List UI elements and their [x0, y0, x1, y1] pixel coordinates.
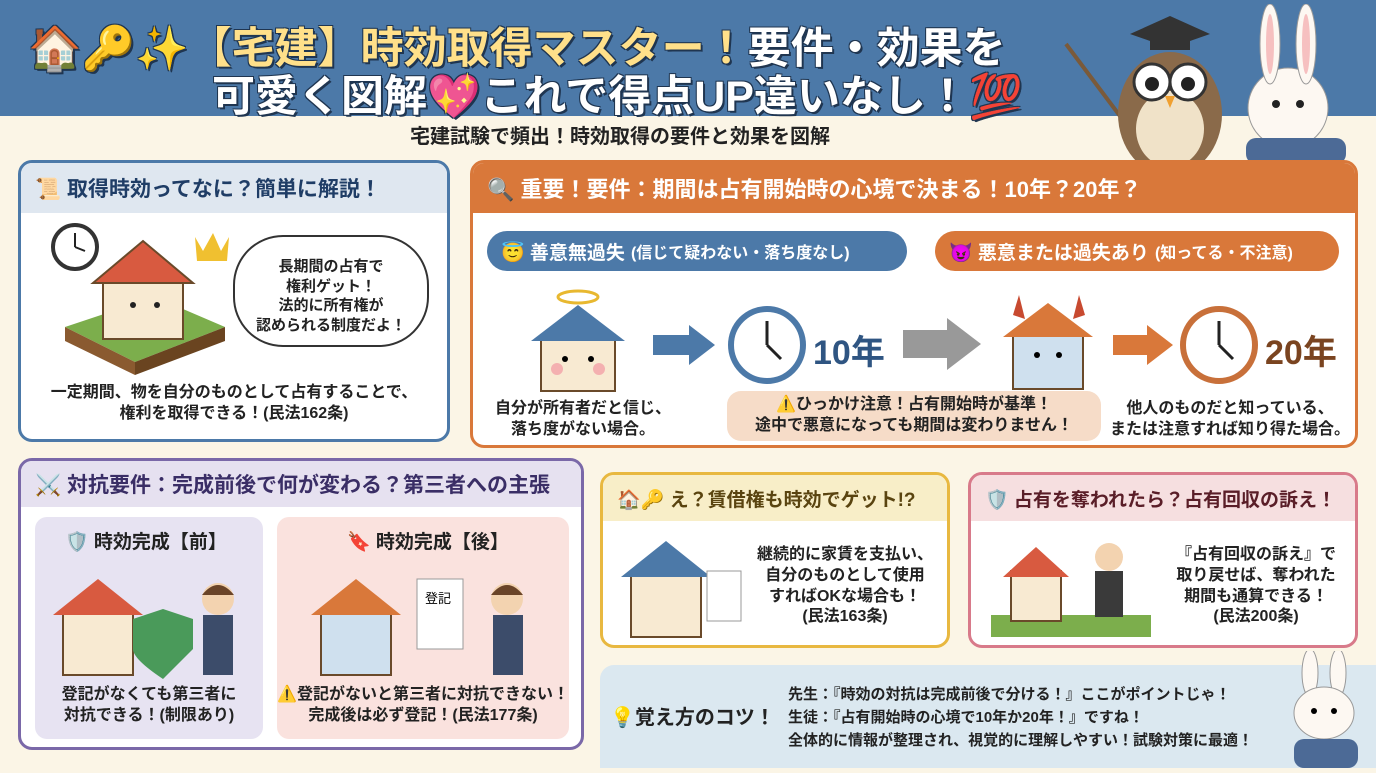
subtitle: 宅建試験で頻出！時効取得の要件と効果を図解 [410, 126, 830, 148]
subcard: after: ⚠️登記がないと第三者に対抗できない！ [277, 686, 569, 703]
clock 20 [1180, 306, 1258, 384]
subcard: before [35, 517, 263, 739]
illustration [991, 543, 1151, 637]
clock 10 [728, 306, 806, 384]
icon: devil house [1003, 295, 1093, 390]
panel: lease right: すればOKな場合も！ [769, 588, 921, 605]
text good faith: 自分が所有者だと信じ、 [495, 400, 671, 417]
bubble: bad faith: (知ってる・不注意) [1155, 245, 1293, 262]
illustration: house with clock and crown [51, 223, 229, 375]
icon: rabbit [1294, 651, 1358, 768]
arrow gray [903, 318, 981, 370]
text bad faith [1110, 399, 1350, 438]
speech bubble: 認められる制度だよ！ [256, 316, 406, 334]
description: 一定期間、物を自分のものとして占有することで、 [51, 384, 417, 401]
panel header: 🏠🔑 え？賃借権も時効でゲット!? [617, 490, 916, 510]
panel: recovery of possession: 期間も通算できる！ [1184, 588, 1328, 605]
panel: memory tip [600, 665, 1376, 768]
panel: recovery of possession [968, 472, 1358, 648]
panel: lease right [600, 472, 950, 648]
illustration: 登記 [425, 588, 451, 607]
20 years: 20年 [1265, 334, 1337, 372]
10 years: 10年 [813, 334, 885, 372]
panel header: 🔍 重要！要件：期間は占有開始時の心境で決まる！10年？20年？ [487, 177, 1141, 202]
panel header: ⚔️ 対抗要件：完成前後で何が変わる？第三者への主張 [35, 474, 550, 497]
text bad faith: または注意すれば知り得た場合。 [1110, 421, 1350, 438]
panel: recovery of possession: 取り戻せば、奪われた [1176, 567, 1336, 584]
subcard: before: 対抗できる！(制限あり) [64, 707, 234, 724]
tip text: 生徒：『占有開始時の心境で10年か20年！』ですね！ [788, 709, 1144, 726]
caution callout: 途中で悪意になっても期間は変わりません！ [755, 417, 1073, 434]
subcard: after: 🔖 時効完成【後】 [347, 532, 509, 553]
speech bubble: 長期間の占有で [278, 258, 384, 275]
bubble: good faith: (信じて疑わない・落ち度なし) [631, 245, 850, 262]
subcard: after [277, 517, 569, 739]
subcard: before: 🛡️ 時効完成【前】 [65, 532, 227, 553]
text bad faith: 他人のものだと知っている、 [1126, 400, 1334, 417]
bubble: good faith [487, 231, 907, 271]
panel: opposability [18, 458, 584, 750]
panel: what is acquisitive prescription [18, 160, 450, 442]
caution callout [727, 391, 1101, 441]
title line 2: 可愛く図解💖これで得点UP違いなし！💯 [212, 73, 1023, 121]
arrow blue [653, 325, 715, 365]
panel header: 🛡️ 占有を奪われたら？占有回収の訴え！ [985, 490, 1336, 510]
illustration [53, 579, 234, 679]
speech bubble [233, 235, 429, 347]
panel: lease right: (民法163条) [802, 608, 888, 625]
tip heading: 💡覚え方のコツ！ [610, 707, 775, 729]
panel header [21, 163, 447, 213]
panel: recovery of possession: (民法200条) [1213, 608, 1299, 625]
panel header [473, 163, 1355, 213]
panel: recovery of possession: 『占有回収の訴え』で [1176, 546, 1336, 563]
panel: requirements [470, 160, 1358, 448]
bubble: good faith: 😇 善意無過失 [501, 242, 625, 264]
title line 1: 🏠🔑✨【宅建】時効取得マスター！要件・効果を [28, 25, 1006, 73]
header band [0, 0, 1376, 116]
text good faith [495, 399, 671, 438]
icon: house with contract [621, 541, 742, 638]
tip text [788, 686, 1253, 749]
subcard: after: 完成後は必ず登記！(民法177条) [308, 707, 538, 724]
description [51, 383, 417, 422]
speech bubble: 権利ゲット！ [286, 278, 376, 294]
icon: angel house [531, 290, 625, 392]
speech bubble: 法的に所有権が [278, 297, 384, 314]
arrow orange [1113, 325, 1173, 365]
panel: lease right: 継続的に家賃を支払い、 [757, 546, 933, 563]
text good faith: 落ち度がない場合。 [511, 421, 655, 438]
caution callout: ⚠️ひっかけ注意！占有開始時が基準！ [776, 396, 1052, 413]
panel header [21, 461, 581, 507]
bubble: bad faith: 😈 悪意または過失あり [949, 242, 1149, 264]
subcard: before: 登記がなくても第三者に [62, 686, 236, 703]
panel header [603, 475, 947, 521]
panel header [971, 475, 1355, 521]
illustration [311, 578, 523, 676]
bubble: bad faith [935, 231, 1339, 271]
panel: lease right: 自分のものとして使用 [765, 567, 925, 584]
description: 権利を取得できる！(民法162条) [119, 405, 349, 422]
tip text: 先生：『時効の対抗は完成前後で分ける！』ここがポイントじゃ！ [788, 686, 1231, 703]
tip text: 全体的に情報が整理され、視覚的に理解しやすい！試験対策に最適！ [788, 732, 1253, 749]
mascots: owl and rabbit [1064, 4, 1346, 160]
panel header: 📜 取得時効ってなに？簡単に解説！ [35, 178, 381, 201]
